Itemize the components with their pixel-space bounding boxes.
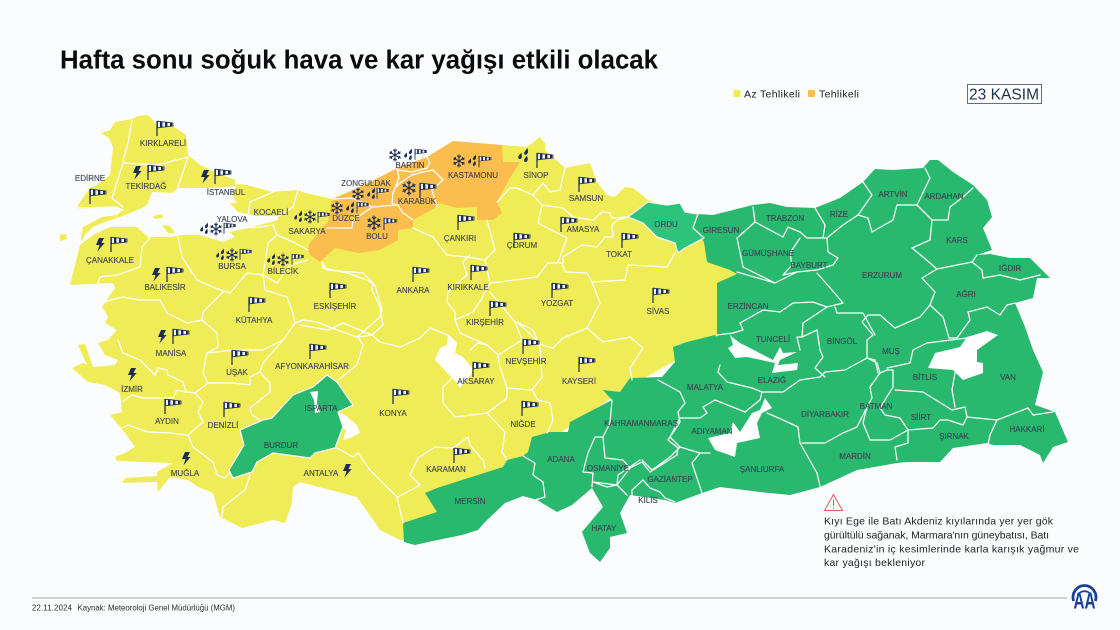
Karabük: KARABÜK bbox=[398, 197, 437, 206]
Gaziantep: GAZİANTEP bbox=[647, 475, 693, 484]
Ağrı: AĞRI bbox=[956, 290, 976, 299]
legend: Az Tehlikeli bbox=[744, 88, 800, 100]
Niğde: NİĞDE bbox=[510, 420, 536, 429]
Düzce: DÜZCE bbox=[332, 214, 360, 223]
Tunceli: TUNCELİ bbox=[756, 335, 790, 344]
Hatay: HATAY bbox=[592, 524, 617, 533]
Erzincan: ERZİNCAN bbox=[728, 302, 769, 311]
Karaman: KARAMAN bbox=[426, 465, 466, 474]
orange province borders bbox=[327, 157, 443, 228]
Nevşehir bbox=[506, 339, 547, 366]
Samsun bbox=[569, 177, 603, 203]
Kahramanmaraş: KAHRAMANMARAŞ bbox=[604, 419, 678, 428]
Afyonkarahisar bbox=[275, 344, 349, 371]
Siirt: SİİRT bbox=[911, 413, 931, 422]
region: Thrace, low hazard bbox=[78, 115, 235, 242]
Bolu: BOLU bbox=[366, 232, 388, 241]
warning text: Karadeniz'in iç kesimlerinde karla karışık yağmur ve bbox=[824, 544, 1079, 556]
region: Isparta and Burdur bbox=[229, 375, 353, 478]
Adana: ADANA bbox=[547, 455, 575, 464]
Malatya: MALATYA bbox=[687, 383, 724, 392]
Muş: MUŞ bbox=[882, 347, 900, 356]
date box: 23 KASIM bbox=[969, 86, 1039, 104]
Bilecik bbox=[267, 253, 304, 276]
Van: VAN bbox=[1000, 373, 1016, 382]
Kayseri bbox=[562, 357, 596, 386]
Sakarya bbox=[288, 210, 330, 236]
Iğdır: IĞDIR bbox=[999, 264, 1021, 273]
Afyonkarahisar: AFYONKARAHİSAR bbox=[275, 362, 349, 371]
region: Anatolia, low hazard bbox=[70, 137, 737, 540]
Denizli: DENİZLİ bbox=[208, 421, 238, 430]
region: Ordu bbox=[628, 202, 704, 253]
Sinop: SİNOP bbox=[524, 171, 548, 180]
Bilecik: BİLECİK bbox=[268, 267, 299, 276]
Aksaray: AKSARAY bbox=[457, 377, 495, 386]
Kırşehir bbox=[466, 301, 506, 327]
Aydın bbox=[155, 399, 181, 426]
Amasya bbox=[561, 217, 600, 234]
Sivas: SİVAS bbox=[647, 307, 669, 316]
region: Black Sea, hazardous bbox=[308, 141, 520, 262]
legend: Tehlikeli bbox=[819, 88, 859, 100]
Aydın: AYDIN bbox=[155, 417, 179, 426]
Balıkesir: BALIKESİR bbox=[144, 283, 186, 292]
warning text: gürültülü sağanak, Marmara'nın güneybatısı, Batı bbox=[824, 530, 1049, 542]
warning text: Kıyı Ege ile Batı Akdeniz kıyılarında yer yer gök bbox=[824, 516, 1054, 528]
Eskişehir bbox=[314, 283, 357, 311]
Bolu bbox=[366, 216, 397, 241]
Kütahya: KÜTAHYA bbox=[236, 316, 273, 325]
Osmaniye: OSMANİYE bbox=[587, 464, 629, 473]
Yozgat: YOZGAT bbox=[541, 299, 573, 308]
Bayburt: BAYBURT bbox=[790, 261, 828, 270]
Denizli bbox=[208, 402, 240, 430]
Kırklareli: KIRKLARELİ bbox=[140, 139, 186, 148]
İstanbul bbox=[201, 169, 246, 197]
Ardahan: ARDAHAN bbox=[924, 192, 964, 201]
Eskişehir: ESKİŞEHİR bbox=[314, 302, 357, 311]
Sakarya: SAKARYA bbox=[288, 227, 326, 236]
title: Hafta sonu soğuk hava ve kar yağışı etkili olacak bbox=[60, 46, 659, 74]
Aksaray bbox=[457, 362, 495, 386]
Sivas bbox=[647, 288, 669, 316]
Bartın: BARTIN bbox=[395, 161, 425, 170]
Düzce bbox=[331, 201, 369, 223]
Burdur: BURDUR bbox=[264, 441, 298, 450]
province borders bbox=[78, 120, 1053, 523]
Tekirdağ bbox=[126, 165, 166, 191]
Şanlıurfa: ŞANLIURFA bbox=[740, 465, 785, 474]
province labels and weather icons bbox=[75, 121, 1045, 533]
Ankara bbox=[397, 267, 430, 295]
Kocaeli: KOCAELİ bbox=[254, 208, 288, 217]
Karabük bbox=[398, 181, 437, 206]
Bartın bbox=[389, 148, 427, 170]
Kütahya bbox=[236, 297, 273, 325]
islands bbox=[60, 214, 175, 241]
Çankırı bbox=[444, 215, 476, 243]
Şırnak: ŞIRNAK bbox=[939, 432, 970, 441]
Tekirdağ: TEKİRDAĞ bbox=[126, 182, 166, 191]
Kars: KARS bbox=[946, 236, 968, 245]
Gümüşhane: GÜMÜŞHANE bbox=[742, 249, 794, 258]
İzmir bbox=[121, 368, 143, 394]
Antalya: ANTALYA bbox=[304, 469, 339, 478]
Artvin: ARTVİN bbox=[878, 190, 908, 199]
Çorum bbox=[507, 233, 537, 250]
Yalova: YALOVA bbox=[217, 215, 248, 224]
Kırıkkale: KIRIKKALE bbox=[447, 283, 489, 292]
Edirne: EDİRNE bbox=[75, 174, 105, 183]
Elazığ: ELAZIĞ bbox=[758, 376, 786, 385]
Tokat: TOKAT bbox=[606, 250, 632, 259]
Antalya bbox=[304, 464, 352, 478]
Samsun: SAMSUN bbox=[569, 194, 603, 203]
Mersin: MERSİN bbox=[454, 497, 486, 506]
map of Turkey bbox=[60, 115, 1068, 562]
footer source: 22.11.2024 bbox=[32, 604, 73, 612]
Tokat bbox=[606, 233, 638, 259]
warning text: kar yağışı bekleniyor bbox=[824, 557, 926, 569]
Konya bbox=[379, 389, 409, 418]
Balıkesir bbox=[144, 267, 186, 292]
İzmir: İZMİR bbox=[121, 385, 143, 394]
Hakkari: HAKKARİ bbox=[1009, 425, 1045, 434]
Amasya: AMASYA bbox=[567, 225, 600, 234]
Niğde bbox=[510, 401, 538, 429]
Diyarbakır: DİYARBAKIR bbox=[801, 410, 849, 419]
Uşak bbox=[226, 350, 249, 377]
Rize: RİZE bbox=[830, 210, 848, 219]
Karaman bbox=[426, 448, 470, 474]
Adıyaman: ADIYAMAN bbox=[691, 427, 733, 436]
Çorum: ÇORUM bbox=[507, 241, 537, 250]
İstanbul: İSTANBUL bbox=[207, 188, 246, 197]
Çanakkale bbox=[86, 237, 134, 265]
Mardin: MARDİN bbox=[839, 452, 871, 461]
Erzurum: ERZURUM bbox=[862, 271, 902, 280]
Muğla bbox=[171, 452, 200, 478]
Ordu: ORDU bbox=[654, 220, 678, 229]
Bursa bbox=[216, 248, 252, 271]
Isparta: ISPARTA bbox=[305, 404, 338, 413]
Kastamonu: KASTAMONU bbox=[448, 171, 498, 180]
Çanakkale: ÇANAKKALE bbox=[86, 256, 134, 265]
Manisa bbox=[156, 329, 189, 358]
legend bbox=[734, 88, 859, 100]
Yalova bbox=[200, 215, 248, 236]
logo: AA: AA bbox=[1074, 588, 1096, 614]
Kastamonu bbox=[448, 154, 498, 180]
Kırklareli bbox=[140, 121, 186, 148]
footer source: Kaynak: Meteoroloji Genel Müdürlüğü (MGM) bbox=[78, 604, 235, 612]
Kayseri: KAYSERİ bbox=[562, 377, 596, 386]
Batman: BATMAN bbox=[860, 402, 893, 411]
Bingöl: BİNGÖL bbox=[827, 337, 858, 346]
Uşak: UŞAK bbox=[226, 368, 249, 377]
Çankırı: ÇANKIRI bbox=[444, 234, 476, 243]
Bursa: BURSA bbox=[218, 262, 246, 271]
Trabzon: TRABZON bbox=[766, 214, 804, 223]
region: east and south, no hazard bbox=[403, 160, 1068, 562]
Yozgat bbox=[541, 283, 573, 308]
icon: warning triangle bbox=[824, 494, 842, 510]
lakes bbox=[310, 327, 998, 457]
Muğla: MUĞLA bbox=[171, 469, 200, 478]
Manisa: MANİSA bbox=[156, 349, 187, 358]
Edirne bbox=[75, 174, 106, 204]
logo: AA bbox=[1073, 586, 1096, 614]
footer line bbox=[32, 598, 1067, 599]
Sinop bbox=[518, 148, 553, 180]
Zonguldak: ZONGULDAK bbox=[341, 179, 392, 188]
Kilis: KİLİS bbox=[638, 496, 658, 505]
Nevşehir: NEVŞEHİR bbox=[506, 357, 547, 366]
Bitlis: BİTLİS bbox=[913, 373, 937, 382]
Kırıkkale bbox=[447, 265, 489, 292]
warning text bbox=[824, 516, 1079, 569]
Ankara: ANKARA bbox=[397, 286, 430, 295]
Giresun: GİRESUN bbox=[703, 226, 739, 235]
Kırşehir: KIRŞEHİR bbox=[466, 318, 504, 327]
Zonguldak bbox=[341, 179, 392, 200]
Konya: KONYA bbox=[379, 409, 407, 418]
